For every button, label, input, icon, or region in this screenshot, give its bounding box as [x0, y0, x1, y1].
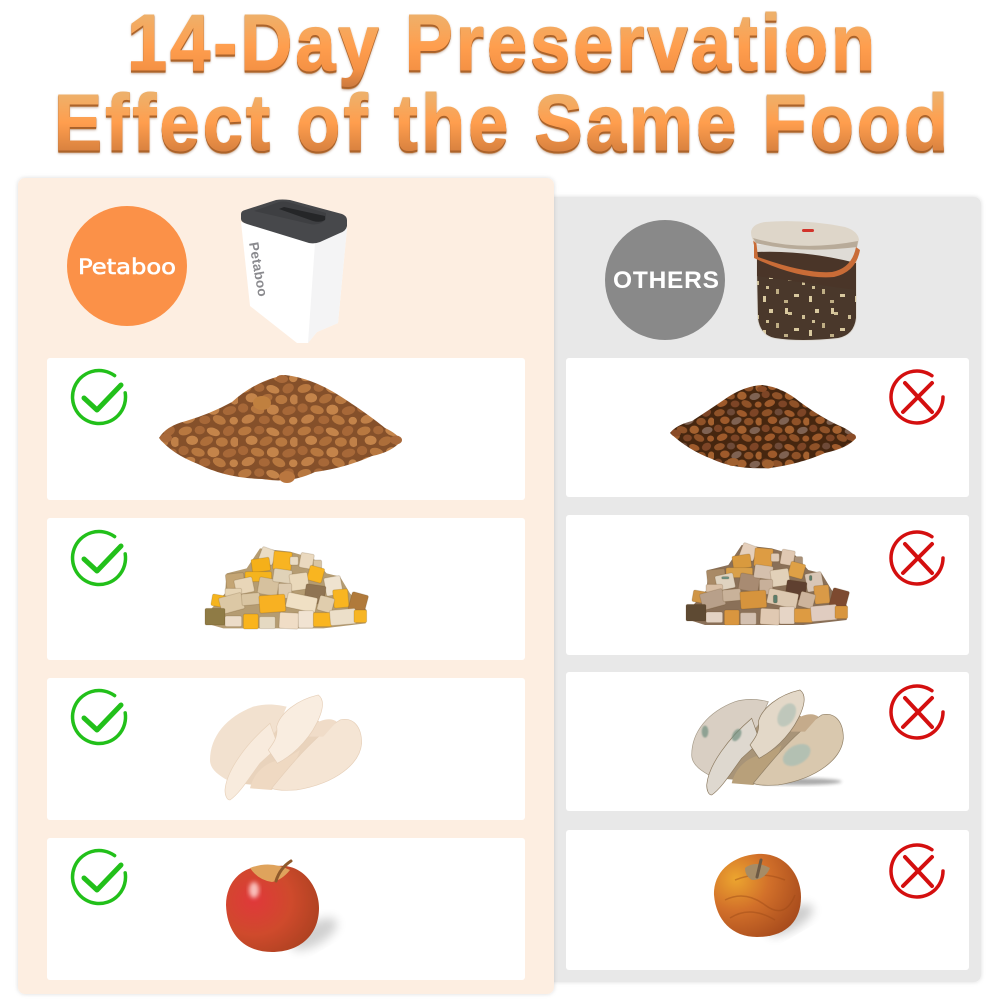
card: others apple: [566, 830, 969, 970]
card: others kibble: [566, 358, 969, 497]
food: fresh apple: [226, 861, 342, 957]
food: spoiled freeze-dried cubes: [686, 542, 850, 625]
food: fresh kibble pile: [159, 375, 402, 483]
icon: petaboo container: [241, 200, 347, 343]
icon: petaboo container: Petaboo: [246, 241, 270, 298]
icon: red cross: [891, 845, 943, 897]
card: petaboo chicken: [47, 678, 525, 820]
card: others freeze-dried cubes: [566, 515, 969, 655]
title: [54, 0, 948, 168]
card: petaboo apple: [47, 838, 525, 980]
icon: green check: [73, 532, 126, 585]
food: spoiled kibble pile: [670, 385, 856, 468]
panel: others column: [540, 197, 981, 982]
title line 2: Effect of the Same Food: [54, 79, 948, 168]
food: fresh chicken breast: [210, 695, 362, 800]
card: petaboo freeze-dried cubes: [47, 518, 525, 660]
icon: red cross: [891, 532, 943, 584]
title line 1: 14-Day Preservation: [127, 0, 875, 88]
icon: green check: [73, 371, 126, 424]
card: others chicken: [566, 672, 969, 811]
icon: green check: [73, 851, 126, 904]
food: rotten apple: [714, 854, 818, 942]
card: petaboo kibble: [47, 358, 525, 500]
panel: petaboo column: [18, 178, 554, 994]
food: fresh freeze-dried cubes: [205, 546, 369, 629]
icon: others clear container: [751, 221, 860, 341]
icon: red cross: [891, 686, 943, 738]
others panel background: [540, 197, 981, 982]
icon: green check: [73, 691, 126, 744]
others badge: OTHERS: [613, 267, 719, 294]
others badge: [605, 220, 725, 340]
food: spoiled chicken breast: [692, 690, 843, 795]
petaboo badge: Petaboo: [78, 255, 176, 279]
petaboo badge: [67, 206, 187, 326]
icon: red cross: [891, 371, 943, 423]
petaboo panel background: [18, 178, 554, 994]
